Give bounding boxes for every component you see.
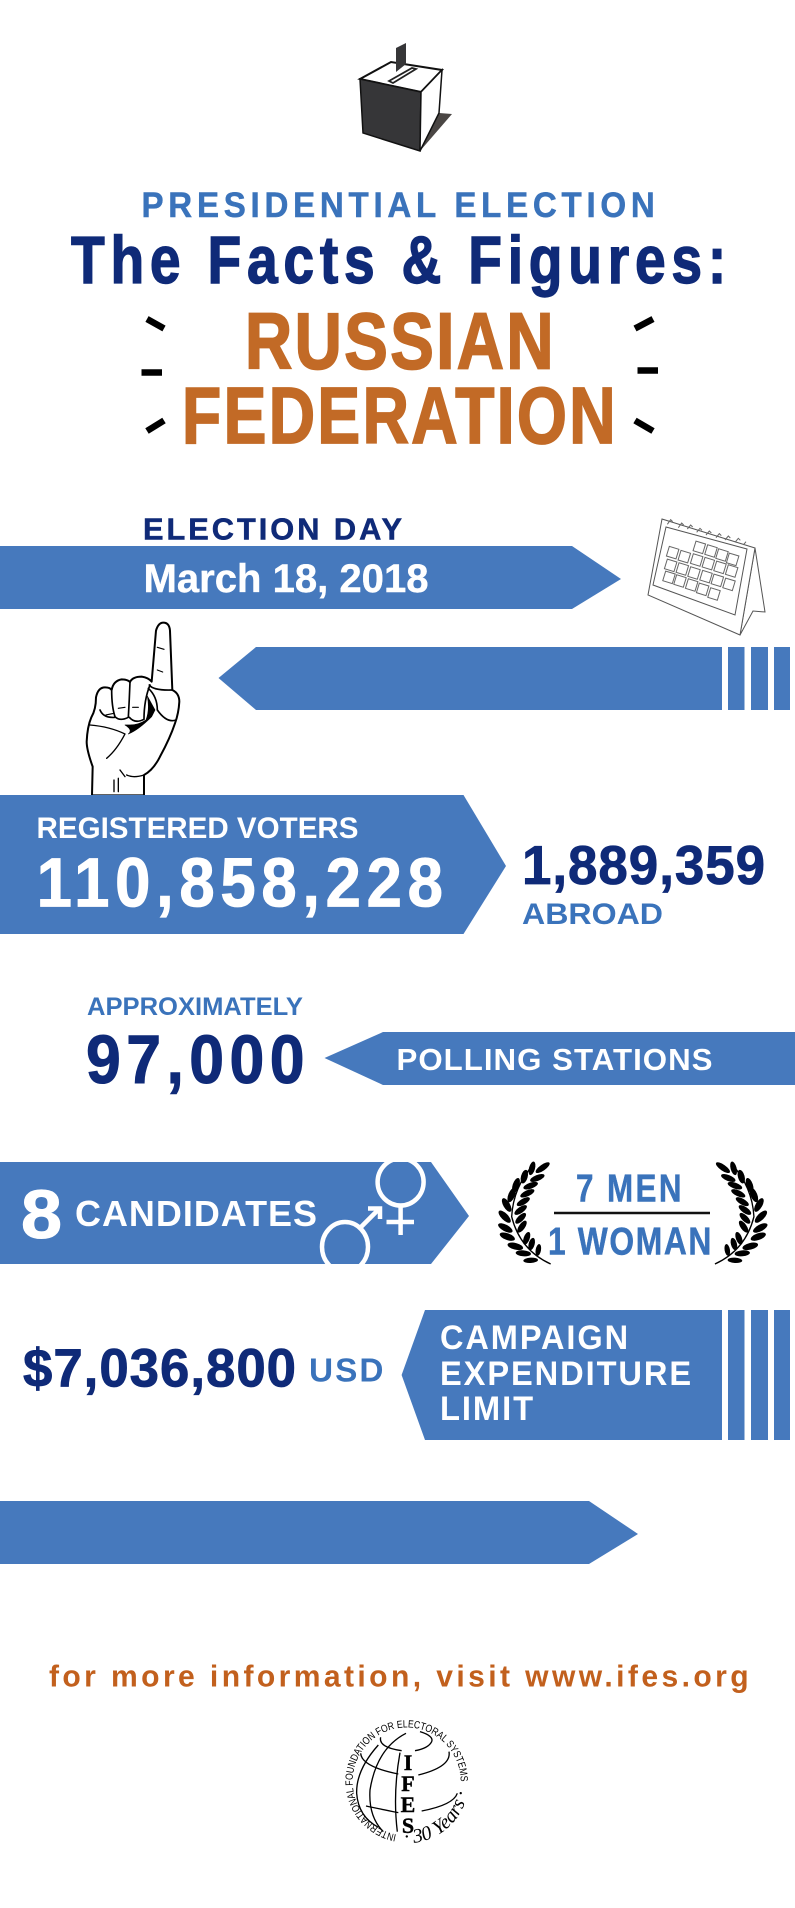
footer: website link text: for more information, visit www.ifes.org [49,1659,752,1694]
decorative emphasis ticks [142,319,658,431]
icon: desk calendar [648,519,765,635]
label: election day: ELECTION DAY [143,511,405,546]
label: approximately: APPROXIMATELY [87,993,303,1021]
label: campaign expenditure limit: LIMIT [440,1390,535,1428]
logo letters: F [401,1771,415,1796]
panel: registered voters arrow [0,795,506,934]
label: candidates: CANDIDATES [75,1193,318,1234]
panel: empty right-pointing arrow [0,1501,638,1564]
label: seven men: 7 MEN [576,1168,684,1211]
panel: election date arrow [0,546,621,609]
election date: March 18, 2018 [144,557,428,601]
logo: IFES globe [345,1720,468,1843]
logo letters: E [401,1792,415,1817]
panel: polling stations arrow [324,1032,795,1085]
panel: empty left-pointing ribbon [218,647,790,710]
number: expenditure limit: $7,036,800 [23,1339,297,1399]
logo anniversary text: · 30 Years · [406,1792,464,1843]
heading: presidential election: PRESIDENTIAL ELECTION [142,186,660,225]
divider line [554,1212,710,1214]
title: russian: RUSSIAN [245,296,556,386]
label: polling stations: POLLING STATIONS [396,1042,714,1077]
label: campaign expenditure limit [440,1319,693,1428]
icon: ballot box [360,43,452,151]
panel: campaign expenditure ribbon [402,1310,790,1440]
label: campaign expenditure limit: EXPENDITURE [440,1355,693,1393]
number: polling stations: 97,000 [86,1021,310,1098]
logo ring text: INTERNATIONAL FOUNDATION FOR ELECTORAL SYSTEMS [345,1720,468,1842]
label: one woman: 1 WOMAN [548,1220,713,1263]
logo letters: S [402,1813,414,1838]
logo letters: I [404,1750,412,1775]
number: voters abroad: 1,889,359 [522,834,766,896]
panel: candidates arrow [0,1158,469,1272]
title: federation: FEDERATION [182,371,618,460]
icon: raised index finger [87,623,179,795]
icon: laurel wreath [497,1160,769,1264]
label: abroad: ABROAD [522,898,663,931]
logo letters [401,1750,415,1838]
number: registered voters: 110,858,228 [36,844,448,922]
icon: gender symbols [320,1162,426,1264]
number: candidates: 8 [21,1176,62,1253]
label: registered voters: REGISTERED VOTERS [36,812,358,845]
label: campaign expenditure limit: CAMPAIGN [440,1319,630,1357]
label: usd: USD [309,1352,386,1389]
